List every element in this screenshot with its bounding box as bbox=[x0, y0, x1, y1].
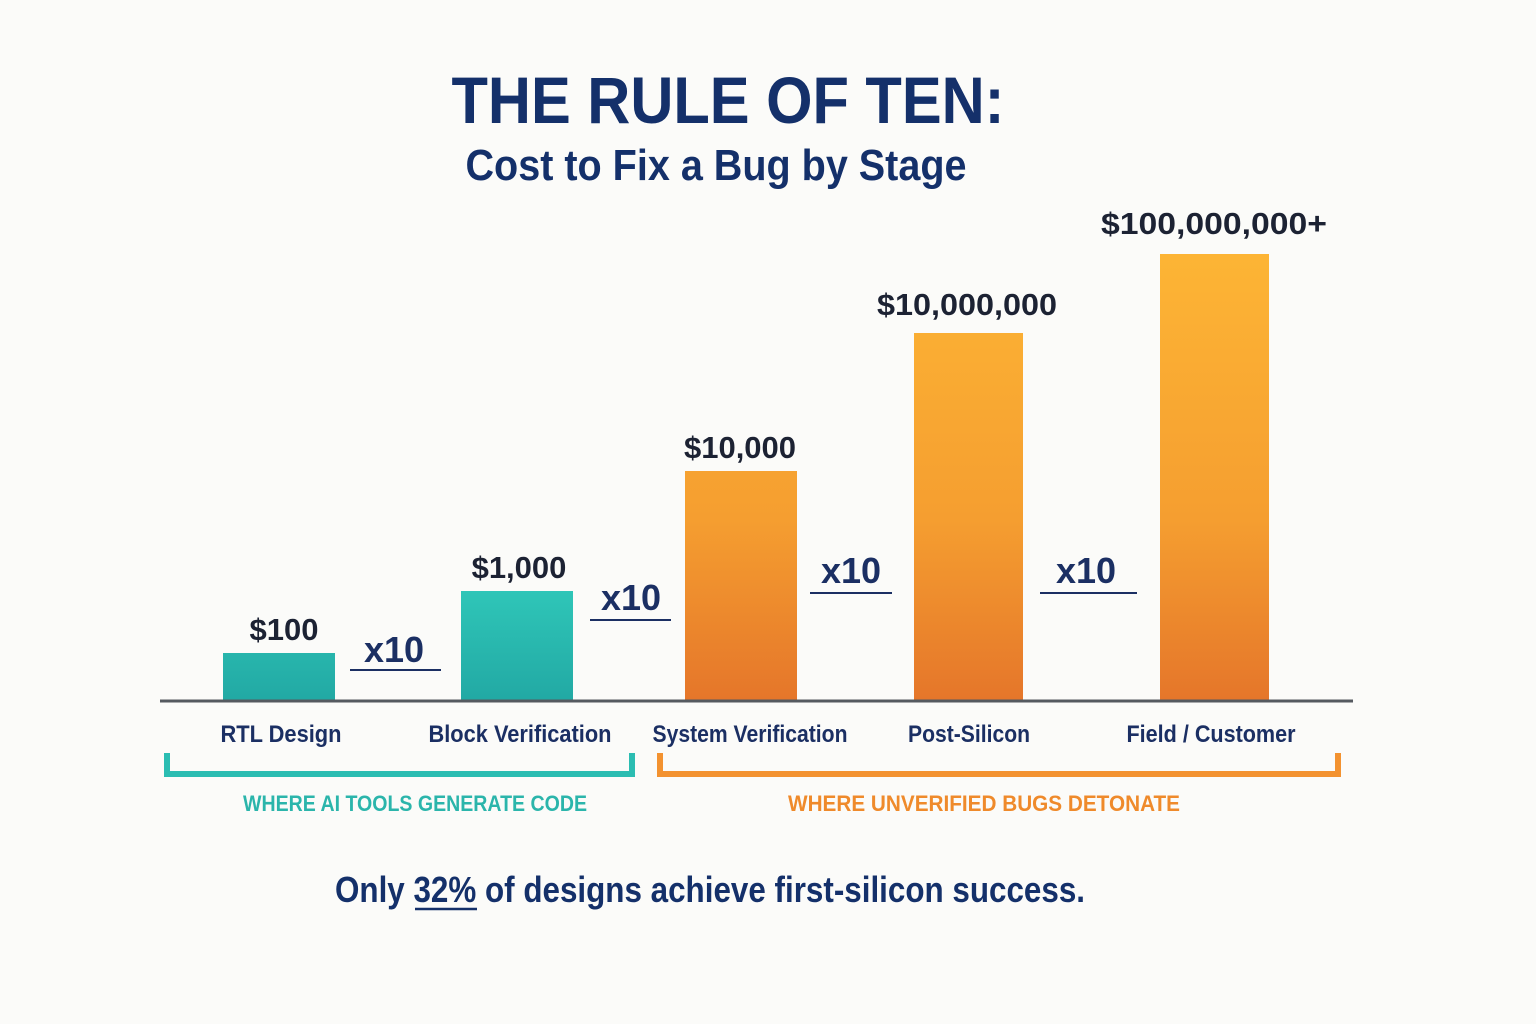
multiplier labels: x10 bbox=[821, 550, 881, 591]
stage labels: RTL Design bbox=[220, 721, 342, 748]
value labels bbox=[250, 206, 1327, 647]
bracket: unverified bugs: WHERE UNVERIFIED BUGS DETONATE bbox=[788, 791, 1180, 816]
bar: Block Verification bbox=[461, 591, 573, 701]
bracket: AI tools: WHERE AI TOOLS GENERATE CODE bbox=[243, 791, 587, 816]
multiplier labels: x10 bbox=[364, 629, 424, 670]
value labels: $1,000 bbox=[472, 550, 566, 585]
stage labels: Post-Silicon bbox=[908, 721, 1030, 748]
multiplier labels bbox=[350, 550, 1137, 670]
bar: Post-Silicon bbox=[914, 333, 1023, 701]
stage labels: Block Verification bbox=[428, 721, 612, 748]
value labels: $10,000,000 bbox=[877, 287, 1057, 322]
stage labels: System Verification bbox=[652, 721, 848, 748]
stage labels bbox=[220, 721, 1296, 748]
bracket: AI tools bbox=[167, 753, 632, 816]
footer statement: Only 32% of designs achieve first-silicon success. bbox=[335, 869, 1085, 910]
bar: System Verification bbox=[685, 471, 797, 701]
title: THE RULE OF TEN: bbox=[452, 63, 1004, 137]
bar: RTL Design bbox=[223, 653, 335, 701]
bracket: unverified bugs bbox=[660, 753, 1338, 816]
multiplier labels: x10 bbox=[601, 577, 661, 618]
value labels: $100 bbox=[250, 612, 318, 647]
stage labels: Field / Customer bbox=[1126, 721, 1296, 748]
subtitle: Cost to Fix a Bug by Stage bbox=[466, 141, 966, 190]
multiplier labels: x10 bbox=[1056, 550, 1116, 591]
value labels: $10,000 bbox=[684, 430, 796, 465]
bar: Field / Customer bbox=[1160, 254, 1269, 701]
value labels: $100,000,000+ bbox=[1101, 206, 1327, 241]
bar chart bbox=[160, 254, 1353, 701]
